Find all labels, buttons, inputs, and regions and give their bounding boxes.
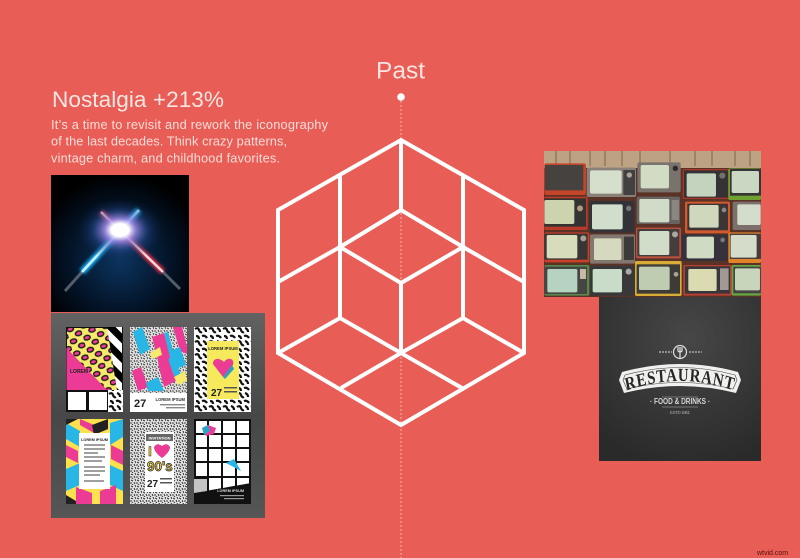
poster: isometric blocks: LOREM IPSUM	[155, 397, 186, 402]
image: 90s poster collection	[51, 313, 265, 518]
text block: nostalgia description: vintage charm, and childhood favorites.	[51, 150, 280, 166]
poster: leopard print: LOREM	[70, 369, 88, 375]
icon: isometric hexagon cube	[278, 140, 524, 425]
text block: nostalgia description: of the last decades. Think crazy patterns,	[51, 134, 287, 149]
text block: nostalgia description	[51, 117, 329, 166]
text: established date: ESTD 1961	[670, 410, 690, 415]
vertical dotted timeline	[400, 97, 402, 558]
poster: colourful isometric frame	[66, 419, 123, 504]
text: food and drinks: · FOOD & DRINKS ·	[650, 397, 710, 406]
poster: I love 90's invitation	[130, 419, 187, 504]
poster: I love 90's invitation: I	[148, 443, 152, 459]
poster: heart on memphis pattern	[194, 327, 251, 412]
poster: heart on memphis pattern: LOREM IPSUM	[208, 346, 238, 351]
heading: Nostalgia +213%: Nostalgia +213%	[52, 87, 224, 112]
poster: black grid	[194, 419, 251, 504]
poster: I love 90's invitation: INVITATION	[148, 436, 171, 440]
poster: I love 90's invitation: 27	[147, 479, 159, 490]
heading: Past: Past	[376, 57, 425, 84]
text block: nostalgia description: It’s a time to revisit and rework the iconography	[51, 117, 329, 132]
watermark: wtvid.com: wtvid.com	[756, 550, 788, 557]
poster: heart on memphis pattern: 27	[211, 388, 223, 399]
timeline dot	[397, 93, 405, 101]
image: wall of retro televisions	[544, 151, 761, 297]
poster: isometric blocks	[130, 327, 187, 412]
banner: restaurant: RESTAURANT	[624, 368, 736, 390]
poster: isometric blocks: 27	[134, 398, 146, 410]
icon: fork badge	[659, 346, 702, 358]
image: restaurant logo on chalkboard	[599, 297, 761, 461]
divider lines around food and drinks	[662, 397, 698, 407]
image: crossed lightsabers	[51, 175, 189, 312]
poster: black grid: LOREM IPSUM	[217, 489, 244, 493]
poster: colourful isometric frame: LOREM IPSUM	[81, 438, 108, 442]
poster: I love 90's invitation: 90's	[147, 459, 173, 474]
poster: leopard print	[66, 327, 123, 412]
